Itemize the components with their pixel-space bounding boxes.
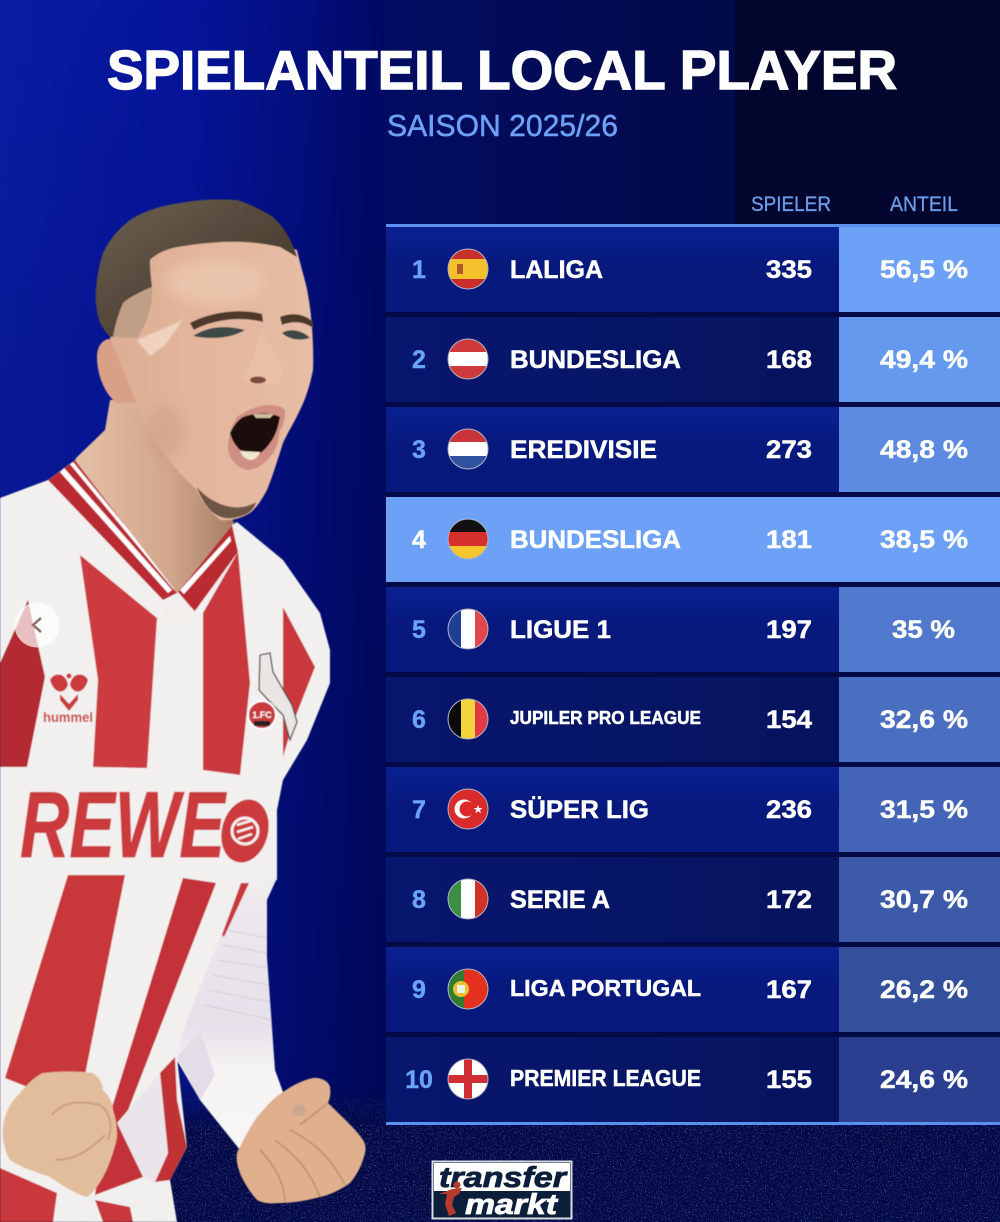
row 3 [386, 407, 1000, 492]
row 8: 30,7 % [880, 886, 968, 914]
undershirt [133, 550, 222, 590]
temple highlight [137, 320, 183, 356]
flag: Belgium [448, 699, 489, 739]
row 5: LIGUE 1 [510, 616, 611, 644]
head [110, 225, 313, 520]
ear [97, 339, 137, 403]
hummel logo [43, 674, 93, 725]
flag: Portugal [448, 969, 488, 1009]
sponsor e badge [215, 794, 275, 868]
right eye [282, 330, 310, 340]
row 6: 32,6 % [880, 706, 968, 734]
row 5: 35 % [892, 616, 955, 644]
flag: England [448, 1059, 488, 1099]
row 9 [386, 947, 1000, 1032]
right arm sleeve [175, 878, 283, 1150]
row 8 [386, 857, 1000, 942]
row 3: EREDIVISIE [510, 436, 657, 464]
right fist [237, 1078, 366, 1203]
row 2: 49,4 % [880, 346, 968, 374]
row 3: 273 [766, 436, 812, 464]
row 9: 26,2 % [880, 976, 968, 1004]
flag: Italy [448, 879, 489, 919]
row 7 [386, 767, 1000, 852]
forehead highlight [165, 260, 265, 304]
column header: Spieler: SPIELER [751, 193, 831, 216]
row 10: 10 [405, 1066, 433, 1094]
right eyebrow [280, 314, 313, 328]
row 4 highlighted: 4 [412, 526, 426, 554]
row 6: 6 [412, 706, 426, 734]
row 8: 172 [766, 886, 812, 914]
row 4 highlighted: 181 [766, 526, 812, 554]
row 9: 9 [412, 976, 426, 1004]
subtitle: SAISON 2025/26 [387, 108, 618, 143]
player photo [0, 199, 366, 1222]
left fist [3, 1072, 117, 1197]
title: SPIELANTEIL LOCAL PLAYER [107, 39, 897, 101]
flag: Germany [448, 519, 488, 560]
transfermarkt logo [432, 1162, 572, 1221]
cheek shadow [145, 404, 185, 460]
row 1: 335 [766, 256, 812, 284]
table [386, 224, 1000, 1125]
row 10: PREMIER LEAGUE [510, 1065, 701, 1091]
row 2: 2 [412, 346, 426, 374]
row 3: 3 [412, 436, 426, 464]
row 4 highlighted: BUNDESLIGA [510, 526, 681, 554]
sponsor REWE: REWE [20, 772, 227, 877]
flag: Austria [448, 339, 488, 379]
row 1: 56,5 % [880, 256, 968, 284]
row 3: 48,8 % [880, 436, 968, 464]
row 7: 31,5 % [880, 796, 968, 824]
row 10: 24,6 % [880, 1066, 968, 1094]
row 6: JUPILER PRO LEAGUE [510, 708, 701, 728]
jersey stripes [80, 555, 157, 768]
slider button [14, 602, 60, 648]
row 7: SÜPER LIG [510, 795, 649, 824]
transfermarkt logo: markt [465, 1189, 559, 1221]
row 5 [386, 587, 1000, 672]
row 1 [386, 227, 1000, 312]
row 1: 1 [412, 256, 426, 284]
row 4 highlighted: 38,5 % [880, 526, 968, 554]
transfermarkt logo: transfer [439, 1162, 568, 1194]
row 5: 5 [412, 616, 426, 644]
row 4 highlighted [386, 497, 1000, 582]
row 1: LALIGA [510, 256, 603, 284]
row 10: 155 [766, 1066, 812, 1094]
left eyebrow [190, 311, 263, 330]
jersey [0, 460, 330, 1222]
row 8: SERIE A [510, 886, 610, 914]
neck [70, 400, 236, 597]
flag: Spain [448, 249, 488, 289]
row 9: LIGA PORTUGAL [510, 975, 701, 1001]
row 5: 197 [766, 616, 812, 644]
row 7: 7 [412, 796, 426, 824]
flag: Netherlands [448, 429, 488, 470]
flag: Turkey [448, 789, 488, 829]
collar [48, 460, 177, 600]
column header: Anteil: ANTEIL [890, 193, 958, 216]
placket [176, 592, 196, 616]
hair [96, 199, 297, 337]
hair fade [113, 287, 152, 338]
row 10 [386, 1037, 1000, 1122]
row 6: 154 [766, 706, 812, 734]
goatee [197, 487, 256, 518]
row 2 [386, 317, 1000, 402]
hummel logo: hummel [43, 709, 93, 725]
nose [243, 328, 283, 384]
row 9: 167 [766, 976, 812, 1004]
teeth [240, 451, 260, 460]
club crest [248, 653, 297, 740]
row 6 [386, 677, 1000, 762]
row 7: 236 [766, 796, 812, 824]
flag: France [448, 609, 489, 649]
row 2: 168 [766, 346, 812, 374]
mouth [228, 405, 285, 470]
left eye [193, 327, 245, 338]
row 8: 8 [412, 886, 426, 914]
club crest: 1.FC [252, 710, 272, 720]
row 2: BUNDESLIGA [510, 346, 681, 374]
